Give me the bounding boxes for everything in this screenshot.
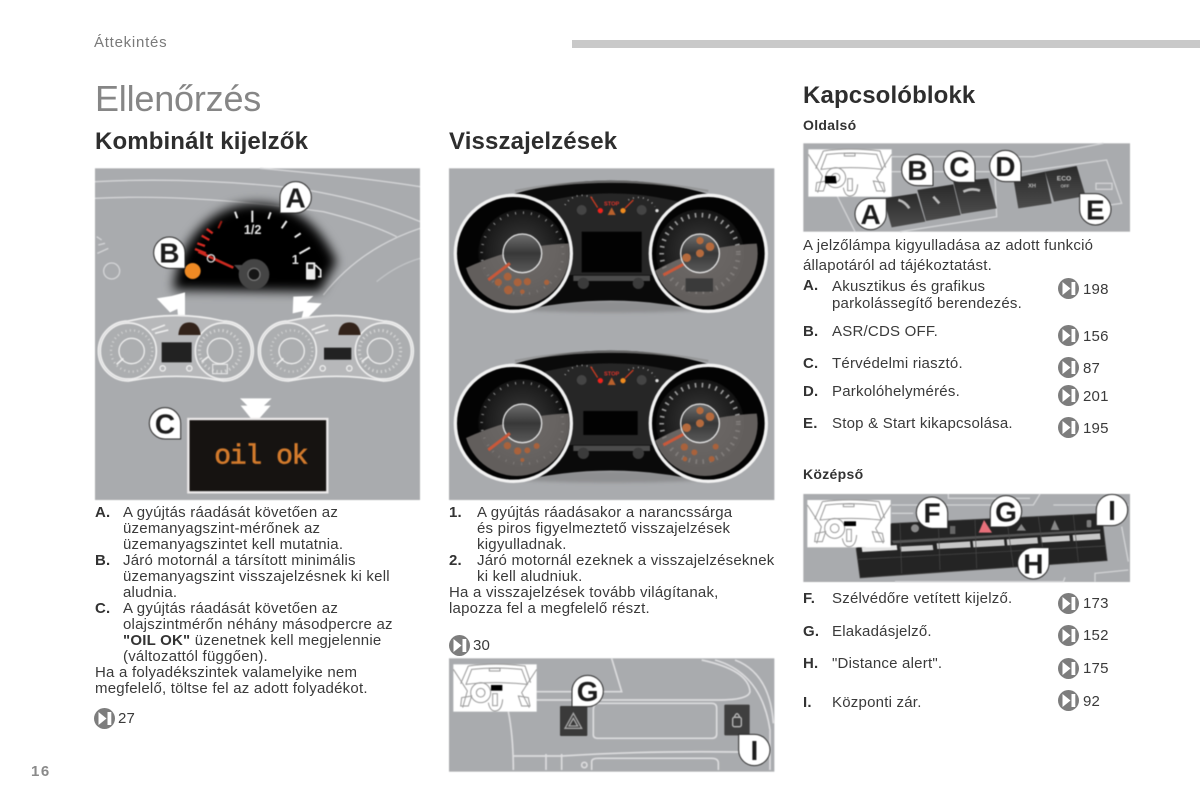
icon: fuel pump <box>306 262 321 280</box>
row G <box>803 623 1109 646</box>
label D <box>990 150 1021 182</box>
subheading: centre: Középső <box>803 466 863 482</box>
label I <box>1096 494 1128 526</box>
item C text: (változattól függően). <box>123 648 268 665</box>
row A: Akusztikus és grafikus <box>832 278 985 295</box>
row C: 87 <box>1083 360 1100 377</box>
reference 30: 30 <box>473 637 490 654</box>
location inset <box>808 149 892 197</box>
item B text: aludnia. <box>123 584 177 601</box>
item 2 text <box>477 552 774 585</box>
closing note <box>95 664 368 697</box>
label A: A <box>861 199 881 230</box>
item C text <box>123 600 393 665</box>
text: combined displays explanation <box>95 504 393 697</box>
label B <box>154 237 185 269</box>
panel: centre switches illustration <box>802 493 1130 583</box>
subheading: side: Oldalsó <box>803 117 856 133</box>
label C: C <box>949 152 969 183</box>
row A: A. <box>803 277 818 294</box>
item B text: üzemanyagszint visszajelzésnek ki kell <box>123 568 390 585</box>
item B text <box>123 552 390 601</box>
item C: C. <box>95 600 110 617</box>
location inset <box>453 664 537 712</box>
text: warning lamps explanation <box>449 504 774 617</box>
row C <box>803 355 1100 378</box>
needle <box>198 252 269 290</box>
label A <box>855 198 886 230</box>
row E: Stop & Start kikapcsolása. <box>832 415 1013 432</box>
text: switch intro: állapotáról ad tájékoztatást. <box>803 257 992 274</box>
row G: Elakadásjelző. <box>832 623 932 640</box>
label F: F <box>923 498 941 529</box>
instrument cluster 2 <box>455 350 766 485</box>
item B text: Járó motornál a társított minimális <box>123 552 356 569</box>
row H: 175 <box>1083 660 1109 677</box>
gauge ticks <box>195 211 310 267</box>
label C: C <box>155 408 175 439</box>
item 1 text: és piros figyelmeztető visszajelzések <box>477 520 730 537</box>
row B: 156 <box>1083 328 1109 345</box>
row G: 152 <box>1083 627 1109 644</box>
cluster outlines <box>98 316 413 381</box>
switch buttons <box>883 166 1086 227</box>
row H: H. <box>803 655 818 672</box>
location inset <box>807 500 891 547</box>
gauge ticks: 1 <box>292 253 299 267</box>
closing note: lapozza fel a megfelelő részt. <box>449 600 650 617</box>
label I: I <box>750 735 758 766</box>
reference 30 <box>449 635 490 656</box>
panel: instrument clusters illustration <box>448 168 775 500</box>
label A: A <box>286 182 306 213</box>
closing note: megfelelő, töltse fel az adott folyadékot. <box>95 680 368 697</box>
heading: switch block: Kapcsolóblokk <box>803 82 975 109</box>
arrows to clusters <box>157 292 322 327</box>
gauge ticks: 1/2 <box>244 223 261 237</box>
label D: D <box>995 151 1015 182</box>
section label: Áttekintés <box>94 34 167 51</box>
label B <box>902 154 933 186</box>
row A: parkolássegítő berendezés. <box>832 295 1022 312</box>
item A text: üzemanyagszint-mérőnek az <box>123 520 320 537</box>
text: switch intro <box>803 237 1093 274</box>
text: switch intro: A jelzőlámpa kigyulladása az adott funkció <box>803 237 1093 254</box>
row B: ASR/CDS OFF. <box>832 323 938 340</box>
panel: combined displays illustration <box>94 167 420 500</box>
row E: 195 <box>1083 420 1109 437</box>
label I <box>739 734 770 766</box>
row I <box>803 690 1100 711</box>
label B: B <box>907 155 927 186</box>
row H <box>803 655 1109 679</box>
row B <box>803 323 1109 346</box>
instrument cluster 1: STOP <box>604 201 620 207</box>
multifunction display with oil ok: oil ok <box>214 442 308 473</box>
label B: B <box>159 238 179 269</box>
label I: I <box>1108 495 1116 526</box>
row D: Parkolóhelymérés. <box>832 383 960 400</box>
row F: Szélvédőre vetített kijelző. <box>832 590 1012 607</box>
row E: E. <box>803 415 818 432</box>
switch buttons: XH <box>1028 184 1036 190</box>
item 1 text: A gyújtás ráadásakor a narancssárga <box>477 504 732 521</box>
item B: B. <box>95 552 110 569</box>
arrow to display <box>240 398 272 423</box>
item A text: A gyújtás ráadását követően az <box>123 504 338 521</box>
closing note <box>449 584 719 617</box>
label G: G <box>577 676 599 707</box>
icon: orange warning lamp <box>185 263 201 279</box>
row F: F. <box>803 590 815 607</box>
item 2: 2. <box>449 552 462 569</box>
item 1 text <box>477 504 732 553</box>
label H: H <box>1023 548 1043 579</box>
panel: hazard and lock switches illustration <box>448 658 775 772</box>
label G <box>990 496 1022 527</box>
label F <box>916 497 948 529</box>
label E: E <box>1086 194 1105 225</box>
row C: Térvédelmi riasztó. <box>832 355 963 372</box>
item 2 text: Járó motornál ezeknek a visszajelzéseknek <box>477 552 774 569</box>
label E <box>1080 194 1111 225</box>
title: Ellenőrzés <box>95 78 261 119</box>
closing note: Ha a folyadékszintek valamelyike nem <box>95 664 357 681</box>
closing note: Ha a visszajelzések tovább világítanak, <box>449 584 719 601</box>
heading: combined displays: Kombinált kijelzők <box>95 128 308 155</box>
reference 27: 27 <box>118 710 135 727</box>
row H: "Distance alert". <box>832 655 942 672</box>
row C: C. <box>803 355 818 372</box>
label H <box>1018 548 1049 579</box>
row I: Központi zár. <box>832 694 922 711</box>
row E <box>803 415 1109 438</box>
hazard switch <box>560 706 587 736</box>
instrument cluster 1 <box>455 180 766 315</box>
row D: D. <box>803 383 818 400</box>
reference 27 <box>94 708 135 729</box>
label C <box>944 151 975 183</box>
header bar <box>572 40 1200 48</box>
item 1 text: kigyulladnak. <box>477 536 567 553</box>
item C text: olajszintmérőn néhány másodpercre az <box>123 616 393 633</box>
switch buttons: ECO <box>1057 176 1071 183</box>
item A: A. <box>95 504 110 521</box>
switch bar <box>856 513 1107 578</box>
item 2 text: ki kell aludniuk. <box>477 568 582 585</box>
switch buttons: OFF <box>1061 183 1070 188</box>
row F: 173 <box>1083 595 1109 612</box>
item A text <box>123 504 343 553</box>
label A <box>280 182 311 213</box>
row A: 198 <box>1083 281 1109 298</box>
lock switch <box>724 705 750 735</box>
page number: 16 <box>31 763 51 780</box>
item 1: 1. <box>449 504 462 521</box>
row G: G. <box>803 623 819 640</box>
item C text: "OIL OK" üzenetnek kell megjelennie <box>123 632 381 649</box>
instrument cluster 2: STOP <box>604 371 620 377</box>
row I: I. <box>803 694 812 711</box>
multifunction display with oil ok <box>188 419 327 492</box>
item A text: üzemanyagszintet kell mutatnia. <box>123 536 343 553</box>
row B: B. <box>803 323 818 340</box>
row A <box>803 277 1109 312</box>
label G <box>572 675 603 707</box>
row F <box>803 590 1109 614</box>
item C text: A gyújtás ráadását követően az <box>123 600 338 617</box>
row D: 201 <box>1083 388 1109 405</box>
label G: G <box>995 496 1017 527</box>
panel: side switches illustration <box>802 142 1130 233</box>
row I: 92 <box>1083 693 1100 710</box>
label C <box>149 408 181 439</box>
row D <box>803 383 1109 406</box>
heading: warning lamps: Visszajelzések <box>449 128 617 155</box>
